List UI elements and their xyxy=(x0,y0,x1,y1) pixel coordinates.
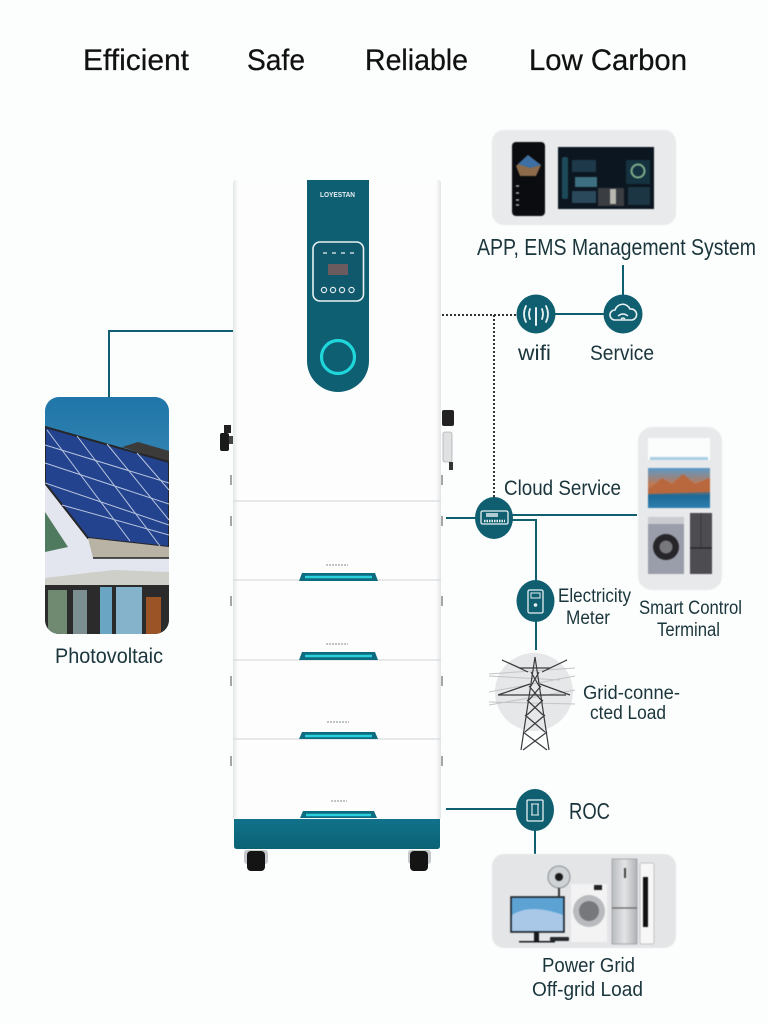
panel: off-grid load appliances xyxy=(492,854,676,948)
display xyxy=(313,242,364,301)
heading: Safe: Safe xyxy=(247,44,305,77)
heading: Low Carbon: Low Carbon xyxy=(529,44,687,77)
module handles xyxy=(299,573,378,818)
cabinet body xyxy=(233,180,441,820)
icon: cloud service inverter xyxy=(475,497,513,539)
storage cabinet xyxy=(233,180,441,871)
panel: smart control terminal appliances xyxy=(638,427,722,590)
monitor xyxy=(511,897,569,942)
module dividers xyxy=(233,501,441,739)
panel grid xyxy=(45,430,169,546)
panel: APP and EMS screens xyxy=(492,130,676,225)
tower air conditioner xyxy=(640,863,654,944)
ground floor glazing xyxy=(45,585,169,634)
label: wifi: wifi xyxy=(517,342,551,365)
heading: Efficient: Efficient xyxy=(83,44,190,77)
label: Service: Service xyxy=(590,342,654,365)
label: ROC: ROC xyxy=(569,798,610,824)
label: Smart Control Terminal xyxy=(639,598,742,641)
window left xyxy=(45,512,68,552)
label: Electricity Meter: Meter xyxy=(566,608,611,629)
icon: wifi xyxy=(516,294,556,334)
label: Photovoltaic: Photovoltaic xyxy=(55,645,163,668)
icon: transmission tower xyxy=(489,653,575,750)
tablet dashboard xyxy=(558,147,654,209)
connector lines xyxy=(109,265,637,854)
icon: ROC xyxy=(516,789,554,831)
eave xyxy=(45,570,169,585)
television xyxy=(648,468,710,508)
label: Electricity Meter: Electricity xyxy=(558,586,631,607)
side connectors xyxy=(220,410,454,766)
solar array xyxy=(45,427,169,547)
right wheel xyxy=(408,850,431,871)
array frame strip xyxy=(88,538,169,558)
washing machine xyxy=(571,884,607,942)
phone xyxy=(512,142,545,216)
label: Power Grid Off-grid Load: Off-grid Load xyxy=(532,979,643,1001)
base xyxy=(234,819,440,849)
fan xyxy=(548,866,570,898)
label: Power Grid Off-grid Load: Power Grid xyxy=(542,955,635,977)
label: Grid-connected Load xyxy=(583,683,680,724)
panel: photovoltaic photo xyxy=(45,397,169,634)
heading: Reliable: Reliable xyxy=(365,44,468,77)
washing machine xyxy=(648,517,684,574)
glass panes xyxy=(48,587,161,634)
label: Cloud Service: Cloud Service xyxy=(504,477,621,500)
label: Electricity Meter xyxy=(558,586,631,629)
ring light xyxy=(322,340,354,374)
label: Grid-connected Load: cted Load xyxy=(590,703,666,724)
left wheel xyxy=(244,850,268,871)
label: Power Grid Off-grid Load xyxy=(532,955,643,1001)
label: Grid-connected Load: Grid-conne- xyxy=(583,683,680,704)
eave line xyxy=(93,557,169,559)
label: Smart Control Terminal: Terminal xyxy=(657,620,720,641)
air conditioner xyxy=(648,438,710,460)
heading row xyxy=(83,44,687,77)
icon: service cloud xyxy=(604,294,642,334)
label: Smart Control Terminal: Smart Control xyxy=(639,598,742,619)
wall xyxy=(45,484,169,578)
back roof xyxy=(122,442,169,462)
brand label: LOYESTAN xyxy=(320,190,355,199)
refrigerator xyxy=(690,513,712,574)
refrigerator xyxy=(612,859,637,944)
module model labels xyxy=(326,565,349,801)
control panel xyxy=(307,180,369,392)
handle light strips xyxy=(305,577,372,815)
icon: electricity meter xyxy=(516,580,554,622)
